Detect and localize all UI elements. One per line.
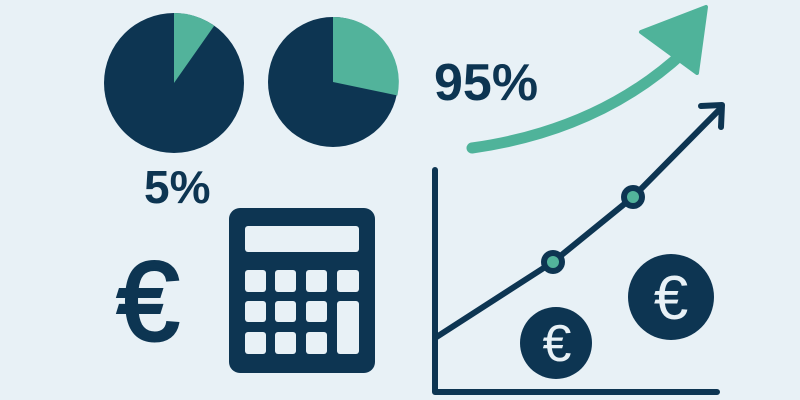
line chart with axes (435, 105, 722, 392)
pie chart: larger share (268, 17, 399, 147)
label 5%: 5% (144, 161, 210, 213)
calculator icon (229, 208, 375, 373)
euro coin large (628, 254, 714, 340)
euro coin small: € (543, 315, 572, 373)
euro coin large: € (654, 264, 688, 333)
euro symbol: € (117, 239, 179, 364)
green growth arrow (472, 7, 706, 148)
euro coin small (520, 307, 592, 379)
pie chart: 5% (104, 13, 244, 153)
label 95%: 95% (434, 54, 538, 112)
